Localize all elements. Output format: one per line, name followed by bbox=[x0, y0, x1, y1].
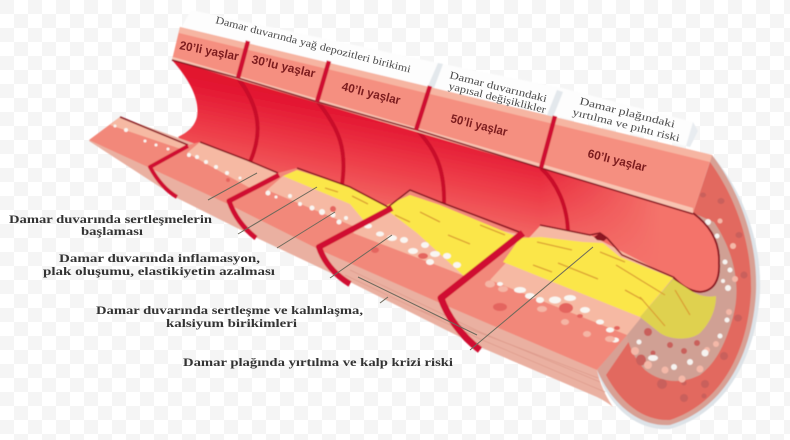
caption: thickening: Damar duvarında sertleşme ve kalınlaşma, bbox=[96, 303, 363, 317]
age labels: 50’li yaşlar bbox=[449, 111, 509, 139]
lower wall: outer layer bbox=[89, 117, 613, 407]
age labels: 30’lu yaşlar bbox=[250, 52, 317, 81]
outer layer fibres bbox=[345, 270, 605, 392]
plaque streaks bbox=[325, 188, 690, 326]
caption: hardening onset: Damar duvarında sertleşmelerin bbox=[9, 212, 212, 226]
lumen interior bbox=[172, 60, 719, 292]
upper wall bbox=[172, 27, 712, 214]
caption: rupture: Damar plağında yırtılma ve kalp krizi riski bbox=[183, 355, 454, 369]
yellow plaque bbox=[283, 170, 716, 339]
red cut lines bbox=[150, 146, 523, 350]
lower wall: media bbox=[89, 117, 627, 370]
lesion dots bbox=[114, 124, 620, 342]
wall dividers bbox=[238, 41, 555, 168]
age labels: 40’lı yaşlar bbox=[340, 79, 402, 108]
caption: thickening bbox=[96, 303, 363, 330]
left captions bbox=[9, 212, 454, 369]
leader lines bbox=[208, 173, 593, 350]
caption: inflammation: Damar duvarında inflamasyon, bbox=[59, 251, 260, 265]
lower wall: intima pale band bbox=[110, 117, 673, 335]
caption: inflammation bbox=[43, 251, 276, 278]
age labels: 60’lı yaşlar bbox=[586, 146, 648, 175]
tan inner ring bbox=[627, 213, 737, 381]
lumen right-end glow bbox=[172, 60, 719, 292]
lower wall top outline bbox=[120, 117, 673, 277]
band captions: yapısal değişiklikler bbox=[447, 81, 548, 116]
cross-section face bbox=[597, 155, 760, 429]
band captions: yırtılma ve pıhtı riski bbox=[571, 107, 681, 145]
band captions: Damar plağındaki bbox=[578, 96, 676, 131]
plaque rupture bbox=[594, 233, 607, 241]
artery rings bbox=[238, 78, 568, 235]
caption: hardening onset: başlaması bbox=[81, 224, 144, 238]
band captions: Damar duvarındaki bbox=[448, 70, 548, 105]
age labels bbox=[178, 38, 648, 175]
caption: thickening: kalsiyum birikimleri bbox=[166, 316, 298, 330]
lumen outline right end bbox=[673, 213, 719, 292]
caption: hardening onset bbox=[9, 212, 212, 238]
caption: inflammation: plak oluşumu, elastikiyetin azalması bbox=[43, 264, 276, 278]
age labels: 20’li yaşlar bbox=[178, 38, 240, 63]
white label band bbox=[180, 10, 698, 147]
band captions bbox=[214, 15, 681, 145]
band captions: Damar duvarında yağ depozitleri birikimi bbox=[214, 15, 412, 76]
